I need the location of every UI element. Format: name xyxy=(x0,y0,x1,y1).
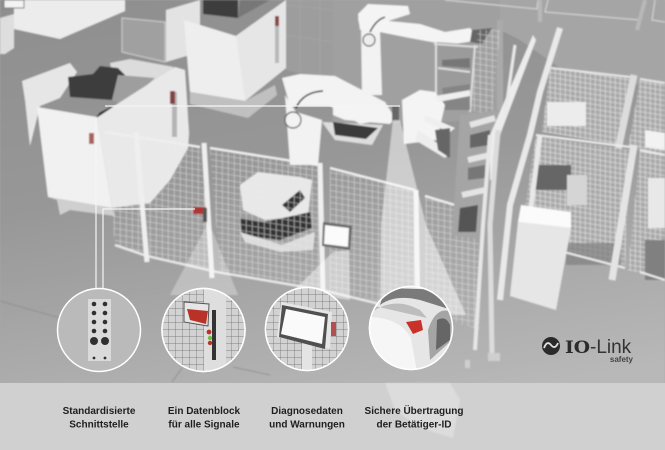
light beam: Datenblock xyxy=(170,225,238,295)
caption: Diagnosedaten und Warnungen: und Warnungen xyxy=(269,420,345,430)
light beam: Diagnose xyxy=(292,250,350,300)
connector lines xyxy=(96,106,400,300)
callout circle: interface xyxy=(58,288,140,372)
callout circle: safety switch xyxy=(161,288,246,372)
caption: Ein Datenblock für alle Signale: Ein Datenblock xyxy=(168,406,240,417)
conveyor and parts xyxy=(452,110,505,240)
caption: Sichere Übertragung der Betätiger-ID: der Betätiger-ID xyxy=(376,420,452,430)
logo: IO-Link safety: safety xyxy=(610,355,634,364)
caption: Standardisierte Schnittstelle: Schnittstelle xyxy=(69,420,129,430)
logo: IO-Link safety xyxy=(542,337,634,364)
HMI panel on fence xyxy=(322,222,352,250)
translucent beam continuation over band xyxy=(385,383,460,438)
fence: front row xyxy=(105,132,480,330)
robot: rear arm xyxy=(358,4,492,95)
caption: Diagnosedaten und Warnungen: Diagnosedaten xyxy=(271,406,343,417)
machine: top centre xyxy=(166,0,286,118)
robot: gripper xyxy=(333,90,470,158)
logo: IO-Link safety: -Link xyxy=(590,337,632,358)
light beam: Betätiger xyxy=(380,120,466,315)
fence: right rear xyxy=(542,68,665,155)
shelves xyxy=(434,20,503,115)
robot: base behind fence xyxy=(240,172,315,252)
logo: IO-Link safety: IO xyxy=(565,338,590,357)
fence: right column posts xyxy=(475,28,560,355)
caption band xyxy=(0,383,665,450)
callout circle: actuator ID xyxy=(370,286,452,372)
caption: Sichere Übertragung der Betätiger-ID: Sichere Übertragung xyxy=(365,406,463,417)
fence: right front xyxy=(518,130,665,280)
machine: left foreground xyxy=(22,59,189,216)
actuator switch on fence xyxy=(193,207,207,222)
caption: Standardisierte Schnittstelle: Standardisierte xyxy=(63,406,135,417)
machine: top left xyxy=(0,0,125,54)
fence post footings xyxy=(465,353,500,368)
robot: centre arm xyxy=(282,74,395,165)
caption: Ein Datenblock für alle Signale: für alle Signale xyxy=(168,420,240,430)
back wall fence xyxy=(122,0,665,125)
callout circle: HMI display xyxy=(264,286,350,372)
cabinet xyxy=(510,205,571,310)
